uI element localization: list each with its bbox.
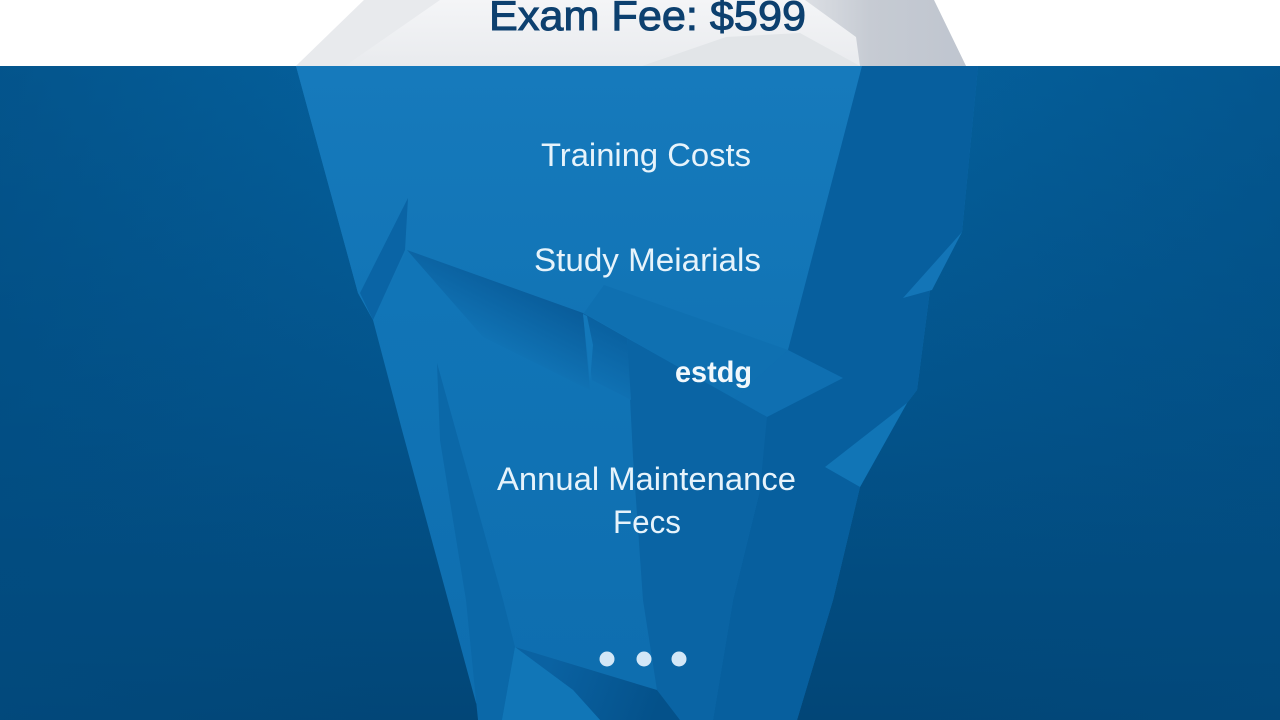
panel: sky background (0, 0, 1280, 66)
upper light facet (296, 66, 862, 417)
diagonal light facet (735, 350, 843, 417)
crack (583, 314, 593, 382)
right shard upper (903, 232, 962, 298)
bottom light facet (502, 647, 600, 720)
label: study materials: Study Meiarials (534, 242, 761, 278)
label: annual maintenance fees (497, 461, 796, 540)
shard upper left (360, 198, 408, 320)
bottom dark facet (515, 647, 680, 720)
subtle facet right of crack (584, 285, 788, 417)
iceberg tip above water (296, 0, 966, 66)
diagonal dark band left (407, 250, 590, 390)
main ice body (296, 66, 978, 720)
diagonal dark band right (583, 313, 631, 400)
ellipsis dots (600, 652, 686, 666)
label: training costs: Training Costs (541, 137, 751, 173)
label: annual maintenance fees: Annual Maintenance (497, 461, 796, 497)
central dark block (627, 338, 767, 720)
left dark sliver (437, 363, 515, 720)
right shaded facet (713, 66, 978, 720)
label: garbled text: estdg (675, 356, 752, 389)
right shard lower (825, 403, 907, 487)
submerged iceberg (296, 66, 978, 720)
label: annual maintenance fees: Fecs (613, 504, 681, 540)
